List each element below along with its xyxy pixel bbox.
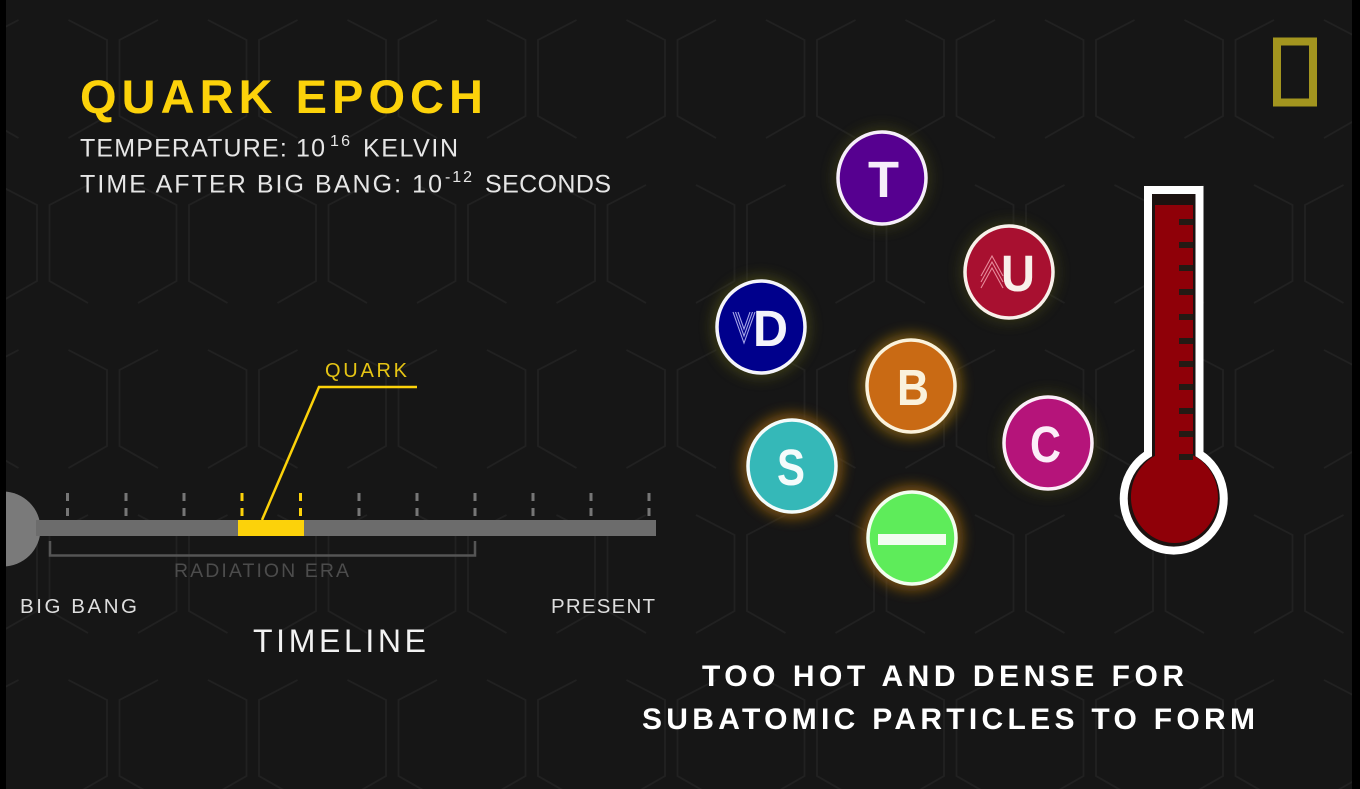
particle: up quark (959, 220, 1059, 324)
temperature line (80, 133, 458, 162)
particle: top quark: T (868, 151, 899, 208)
particle: charm quark: C (1030, 416, 1061, 473)
caption line 1: TOO HOT AND DENSE FOR (702, 660, 1184, 693)
icon: down chevrons (733, 312, 755, 343)
particle: charm quark (998, 391, 1098, 495)
timeline bar (36, 520, 656, 536)
present label: PRESENT (551, 595, 655, 618)
particle: top quark (832, 126, 932, 230)
mercury (1131, 205, 1218, 543)
temperature line: TEMPERATURE: 10 (80, 134, 325, 162)
quark callout line (262, 387, 417, 520)
quark era highlight (238, 520, 304, 536)
big bang label: BIG BANG (20, 595, 137, 618)
particle: strange quark: S (777, 439, 805, 496)
icon: thermometer (1124, 190, 1224, 551)
caption line 2: SUBATOMIC PARTICLES TO FORM (642, 703, 1255, 736)
caption (642, 660, 1255, 736)
big bang semicircle (6, 492, 40, 566)
time line: TIME AFTER BIG BANG: 10 (80, 170, 442, 198)
time line (80, 169, 611, 198)
timeline chart (0, 360, 656, 659)
quark label: QUARK (325, 360, 408, 382)
particle: strange quark (741, 413, 843, 519)
text block: temperature and time (80, 133, 611, 198)
temperature line: 16 (330, 133, 350, 150)
timeline ticks (68, 493, 649, 516)
time line: SECONDS (485, 170, 611, 198)
temperature line: KELVIN (363, 134, 458, 162)
timeline label: TIMELINE (253, 623, 426, 659)
particle: minus sign (861, 485, 963, 591)
radiation era label: RADIATION ERA (174, 560, 349, 582)
particle: down quark: D (753, 300, 788, 357)
title: QUARK EPOCH (80, 70, 483, 123)
time line: -12 (445, 169, 472, 186)
particle: down quark (711, 275, 811, 379)
particle: bottom quark (860, 333, 962, 439)
radiation era bracket (50, 541, 475, 556)
logo: yellow frame (1277, 42, 1313, 102)
particle: bottom quark: B (897, 359, 929, 416)
thermometer ticks (1179, 222, 1193, 457)
icon: up chevrons (981, 256, 1003, 288)
particle: up quark: U (1001, 245, 1035, 302)
